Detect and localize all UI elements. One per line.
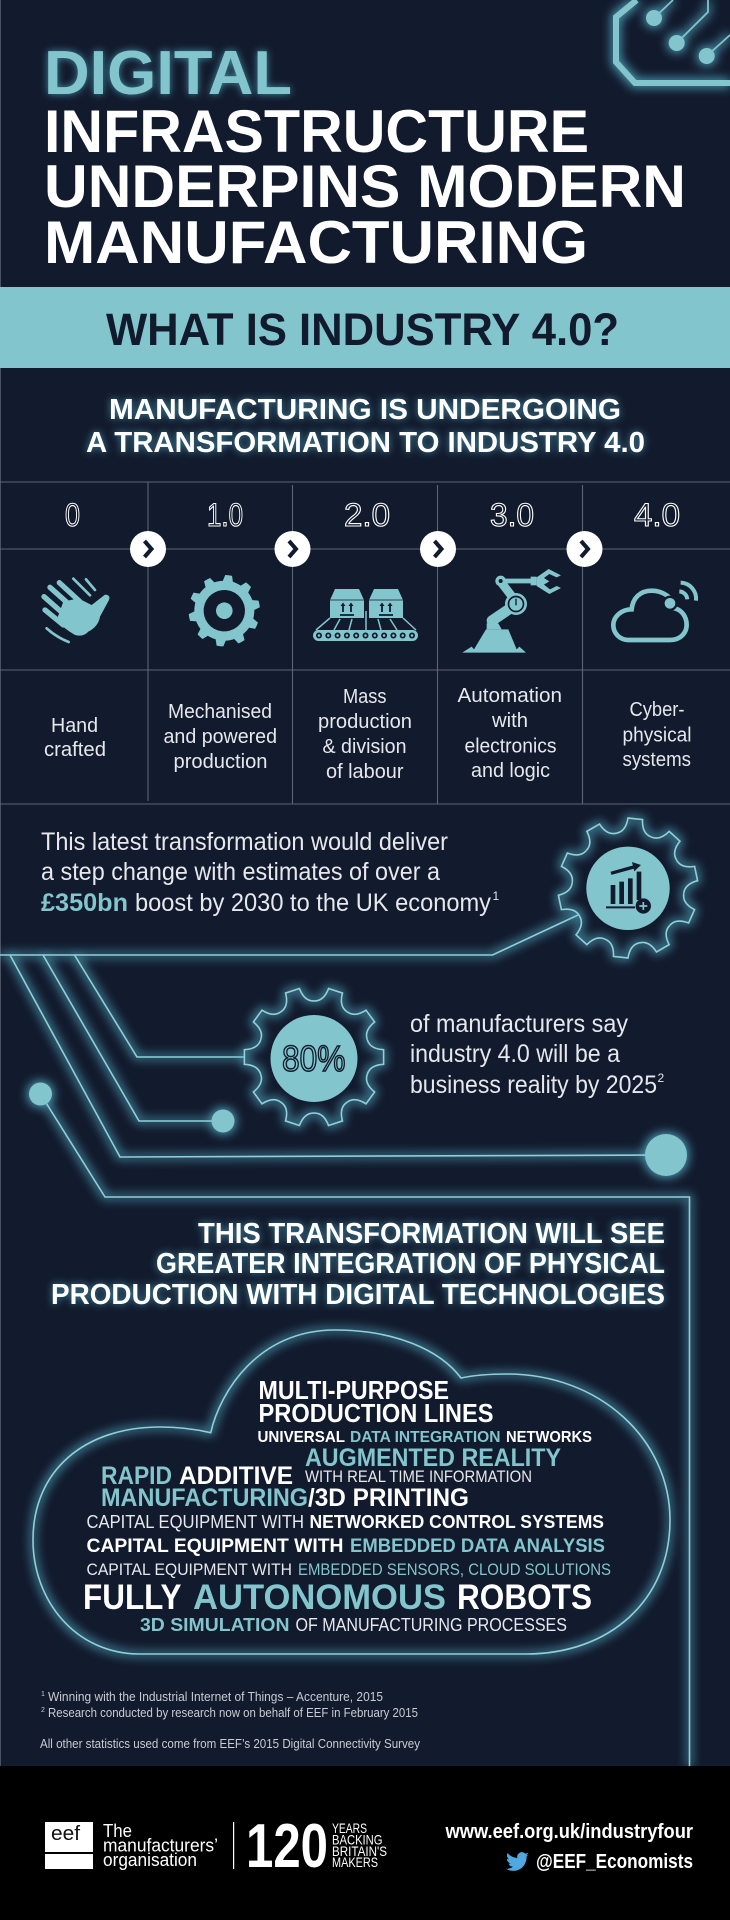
label: automation: electronics — [464, 736, 556, 758]
icon: gear with 80 percent — [224, 969, 404, 1145]
title — [44, 39, 686, 276]
text: economic boost: boost by 2030 to the UK economy — [135, 889, 491, 917]
logo text: manufacturers organisation: organisation — [103, 1850, 197, 1870]
word cloud: NETWORKED CONTROL SYSTEMS — [310, 1512, 604, 1532]
footnotes — [40, 1690, 421, 1751]
text: 80 percent of manufacturers: industry 4.0 will be a — [410, 1040, 620, 1068]
heading: greater integration: GREATER INTEGRATION OF PHYSICAL — [156, 1248, 665, 1280]
label: hand crafted: crafted — [44, 739, 106, 761]
word cloud: /3D PRINTING — [308, 1484, 469, 1512]
text: economic boost: a step change with estimates of over a — [41, 858, 440, 886]
banner: what is industry 4.0: WHAT IS INDUSTRY 4.0? — [106, 304, 619, 355]
title: line 1: INFRASTRUCTURE — [44, 98, 589, 165]
icon: robot arm — [462, 569, 561, 653]
footer — [0, 1766, 730, 1920]
arrow 2 — [274, 531, 310, 567]
cloud outline — [33, 1330, 670, 1654]
arrow 1 — [130, 531, 166, 567]
label: mass production: Mass — [343, 686, 386, 708]
icon: conveyor with boxes — [313, 589, 418, 641]
stage number 1.0: 1.0 — [207, 497, 243, 533]
logo: 120 years: BRITAIN'S — [332, 1843, 387, 1859]
word cloud: EMBEDDED SENSORS, CLOUD SOLUTIONS — [298, 1560, 611, 1579]
label: cyber-physical: physical — [622, 724, 692, 746]
icon: gear with 80 percent: 80% — [282, 1038, 346, 1079]
word cloud: AUGMENTED REALITY — [305, 1444, 561, 1472]
word cloud: NETWORKS — [506, 1429, 592, 1446]
label: automation: Automation — [458, 685, 562, 707]
footnotes: Research conducted by research now on behalf of EEF in February 2015 — [48, 1706, 418, 1720]
label: automation — [458, 685, 562, 782]
logo text: manufacturers organisation — [103, 1821, 218, 1870]
word cloud: UNIVERSAL — [258, 1429, 345, 1446]
footnotes: 2 — [41, 1707, 45, 1714]
logo: 120 years: BACKING — [332, 1832, 382, 1848]
icon: connected cloud — [613, 583, 696, 640]
word cloud: ROBOTS — [457, 1578, 592, 1617]
icon: twitter bird — [506, 1852, 529, 1871]
heading: greater integration — [51, 1218, 665, 1311]
word cloud: CAPITAL EQUIPMENT WITH — [86, 1560, 292, 1579]
text: economic boost: 1 — [492, 889, 500, 903]
text: economic boost — [41, 828, 500, 917]
word cloud: CAPITAL EQUIPMENT WITH — [86, 1512, 304, 1532]
banner: what is industry 4.0 — [0, 287, 730, 368]
panel: industry timeline — [0, 482, 730, 804]
label: mechanised: and powered — [164, 726, 277, 748]
icon: circuit chip corner — [616, 0, 730, 83]
label: cyber-physical — [622, 699, 692, 771]
stage number 4.0: 4.0 — [634, 497, 680, 533]
word cloud: AUTONOMOUS — [193, 1578, 446, 1617]
heading: manufacturing transformation: A TRANSFORMATION TO INDUSTRY 4.0 — [86, 427, 645, 459]
icon: gear with growth chart — [550, 811, 706, 965]
word cloud: MANUFACTURING — [101, 1484, 308, 1512]
icon: gear — [185, 571, 264, 650]
arrow 4 — [566, 531, 602, 567]
website: www.eef.org.uk/industryfour — [445, 1821, 693, 1843]
text: 80 percent of manufacturers — [410, 1010, 664, 1099]
logo: eef — [45, 1822, 93, 1869]
figure: 350bn: £350bn — [41, 889, 128, 917]
text: economic boost: This latest transformation would deliver — [41, 828, 448, 856]
text: 80 percent of manufacturers: business reality by 2025 — [410, 1071, 657, 1099]
label: hand crafted — [44, 715, 106, 761]
label: hand crafted: Hand — [51, 715, 98, 737]
label: mechanised: Mechanised — [168, 701, 272, 723]
label: cyber-physical: Cyber- — [630, 699, 684, 721]
logo: eef: eef — [51, 1823, 80, 1845]
footnotes: All other statistics used come from EEF’s 2015 Digital Connectivity Survey — [40, 1737, 421, 1751]
footnotes: 1 — [41, 1691, 45, 1698]
word cloud: ADDITIVE — [179, 1462, 293, 1490]
title: digital: DIGITAL — [44, 39, 292, 108]
logo text: manufacturers organisation: The — [103, 1821, 132, 1841]
arrow 3 — [420, 531, 456, 567]
heading: manufacturing transformation — [86, 394, 645, 459]
word cloud — [83, 1375, 611, 1635]
label: automation: with — [491, 710, 528, 732]
text: 80 percent of manufacturers: of manufacturers say — [410, 1010, 628, 1038]
logo: 120 years: MAKERS — [332, 1854, 378, 1870]
label: mechanised — [164, 701, 277, 773]
footnotes: Winning with the Industrial Internet of Things – Accenture, 2015 — [48, 1690, 383, 1704]
icon: hand — [44, 579, 109, 642]
text: 80 percent of manufacturers: 2 — [658, 1071, 664, 1085]
word cloud: RAPID — [101, 1462, 172, 1490]
twitter handle: @EEF_Economists — [536, 1851, 693, 1873]
label: cyber-physical: systems — [622, 749, 691, 771]
label: mechanised: production — [174, 751, 268, 773]
label: mass production: of labour — [326, 761, 404, 783]
word cloud: WITH REAL TIME INFORMATION — [305, 1467, 532, 1486]
stage number 3.0: 3.0 — [490, 497, 534, 533]
word cloud: EMBEDDED DATA ANALYSIS — [350, 1536, 605, 1557]
label: mass production: & division — [322, 736, 406, 758]
stage number 0: 0 — [65, 497, 80, 533]
word cloud: OF MANUFACTURING PROCESSES — [296, 1615, 567, 1635]
word cloud: DATA INTEGRATION — [350, 1429, 500, 1446]
heading: manufacturing transformation: MANUFACTURING IS UNDERGOING — [109, 394, 621, 426]
logo: 120 years: 120 — [246, 1812, 328, 1881]
word cloud: 3D SIMULATION — [140, 1615, 290, 1635]
title: line 2: UNDERPINS MODERN — [44, 153, 686, 220]
circuit lines — [0, 915, 690, 1766]
title: line 3: MANUFACTURING — [44, 209, 588, 276]
label: automation: and logic — [471, 760, 550, 782]
heading: greater integration: PRODUCTION WITH DIGITAL TECHNOLOGIES — [51, 1279, 665, 1311]
heading: greater integration: THIS TRANSFORMATION WILL SEE — [198, 1218, 665, 1250]
logo: 120 years: YEARS — [332, 1820, 367, 1836]
stage number 2.0: 2.0 — [344, 497, 390, 533]
word cloud: CAPITAL EQUIPMENT WITH — [86, 1536, 344, 1557]
logo text: manufacturers organisation: manufacturers’ — [103, 1836, 218, 1856]
label: mass production — [318, 686, 412, 783]
word cloud: PRODUCTION LINES — [258, 1398, 494, 1428]
word cloud: FULLY — [83, 1578, 182, 1617]
word cloud: MULTI-PURPOSE — [258, 1375, 449, 1405]
label: mass production: production — [318, 711, 412, 733]
